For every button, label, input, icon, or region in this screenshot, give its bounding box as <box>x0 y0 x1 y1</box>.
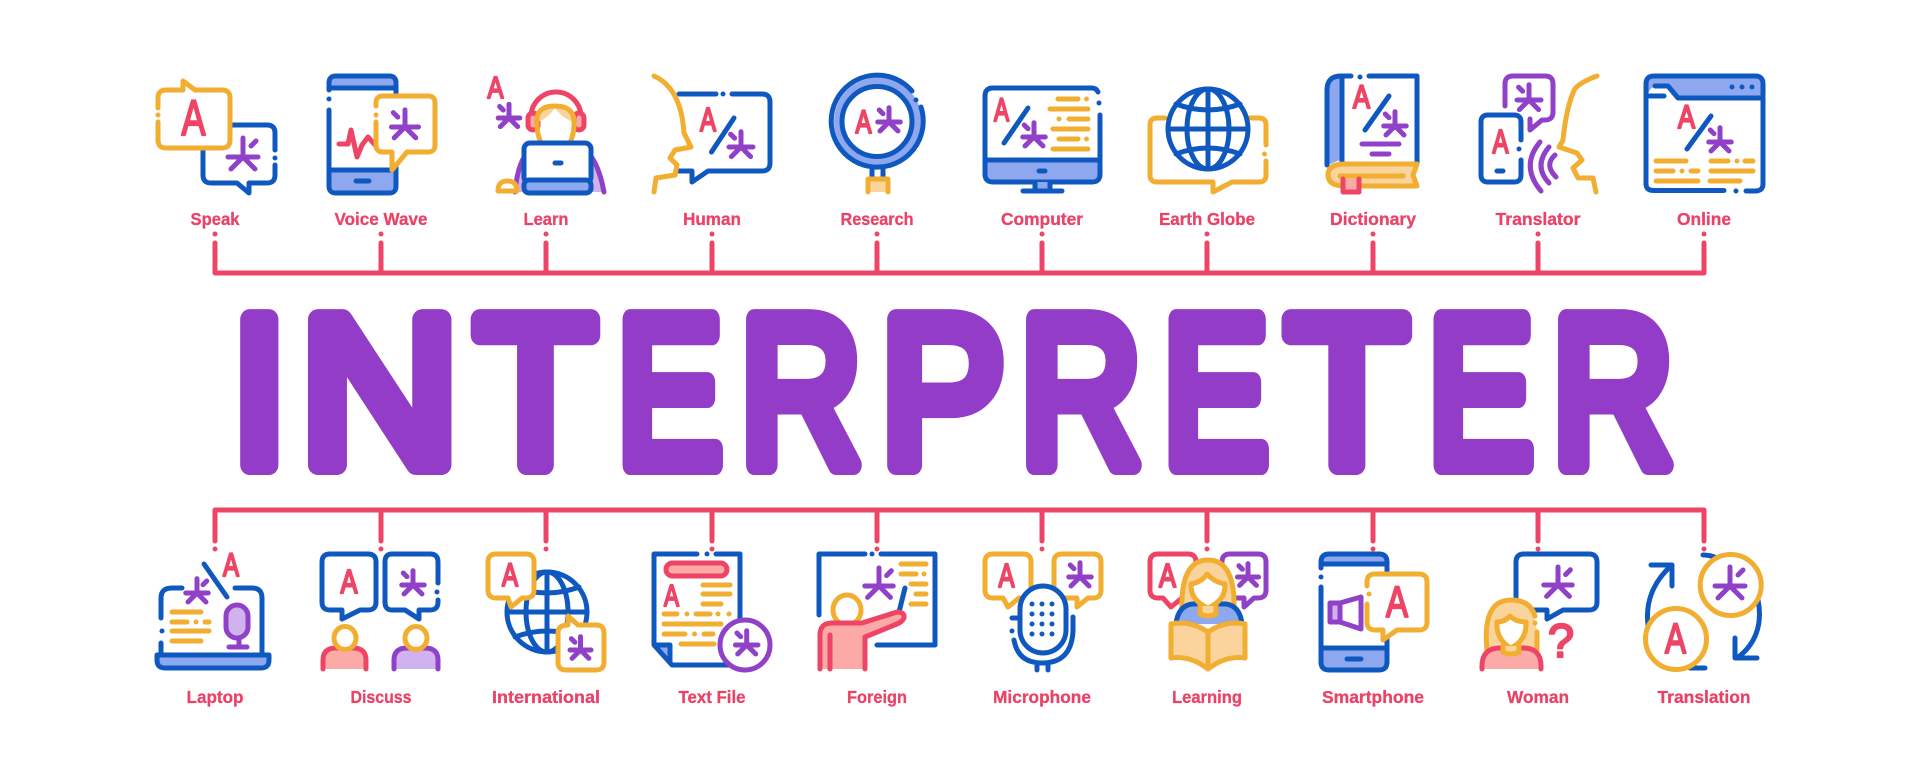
icon: translation: A <box>1665 615 1686 663</box>
icon: woman: ? <box>1548 614 1574 667</box>
label: International: International <box>492 687 600 707</box>
label: Translator: Translator <box>1496 209 1581 229</box>
icon: foreign <box>819 554 935 669</box>
icon: woman <box>1482 554 1597 669</box>
label: Text File: Text File <box>678 687 746 707</box>
connector: top bracket <box>215 234 1704 273</box>
label: Earth Globe: Earth Globe <box>1159 209 1255 229</box>
label: Translation: Translation <box>1658 687 1750 707</box>
title: T <box>476 273 596 510</box>
title: I <box>231 273 288 510</box>
icon: earth globe <box>1150 89 1266 192</box>
icon: international <box>488 554 604 670</box>
label: Smartphone: Smartphone <box>1322 687 1424 707</box>
label: Dictionary: Dictionary <box>1330 209 1416 229</box>
icon: smartphone <box>1321 554 1427 670</box>
title: R <box>740 273 862 510</box>
label: Computer: Computer <box>1001 209 1083 229</box>
icon: computer <box>985 88 1100 191</box>
icon: translator: A <box>1492 123 1508 160</box>
icon: dictionary <box>1327 76 1417 192</box>
label: Laptop: Laptop <box>186 687 244 707</box>
label: Human: Human <box>683 209 741 229</box>
icon: speak: A <box>182 90 206 146</box>
icon: text file: A <box>664 578 679 613</box>
icon: laptop: A <box>223 547 239 583</box>
title: E <box>1428 273 1533 510</box>
label: Microphone: Microphone <box>993 687 1091 707</box>
label: Discuss: Discuss <box>350 687 412 707</box>
icon: online: A <box>1678 99 1696 135</box>
icon: learning: A <box>1159 557 1176 594</box>
icon: learning <box>1150 554 1266 669</box>
title: E <box>1163 273 1268 510</box>
icon: learn: A <box>488 70 504 105</box>
icon: research <box>831 75 923 192</box>
icon: microphone: A <box>998 557 1014 594</box>
icon: text file <box>654 554 770 670</box>
label: Research: Research <box>840 209 914 229</box>
title: N <box>300 273 459 510</box>
title: R <box>1020 273 1142 510</box>
icon: smartphone: A <box>1386 578 1408 627</box>
label: Foreign: Foreign <box>847 687 907 707</box>
title: T <box>1286 273 1407 510</box>
title: P <box>881 273 1005 510</box>
icon: online <box>1646 76 1763 191</box>
icon: discuss: A <box>340 563 358 600</box>
connector: bottom bracket <box>215 510 1704 549</box>
icon: international: A <box>502 557 518 593</box>
label: Online: Online <box>1677 209 1731 229</box>
icon: translator <box>1481 76 1597 192</box>
label: Voice Wave: Voice Wave <box>334 209 428 229</box>
label: Speak: Speak <box>190 209 240 229</box>
icon: laptop <box>157 547 269 668</box>
icon: computer: A <box>994 92 1009 128</box>
icon: human <box>654 76 770 192</box>
icon: human: A <box>700 101 716 138</box>
label: Woman: Woman <box>1507 687 1569 707</box>
icon: translation <box>1646 554 1761 670</box>
icon: speak <box>158 81 275 193</box>
icon: voice wave <box>329 76 435 193</box>
title: R <box>1552 273 1674 510</box>
label: Learn: Learn <box>524 209 568 229</box>
icon: learn <box>488 70 604 193</box>
icon: dictionary: A <box>1353 79 1371 115</box>
icon: research: A <box>856 104 872 140</box>
icon: discuss <box>322 554 438 669</box>
title: E <box>617 273 722 510</box>
label: Learning: Learning <box>1172 687 1242 707</box>
icon: microphone <box>985 554 1101 670</box>
